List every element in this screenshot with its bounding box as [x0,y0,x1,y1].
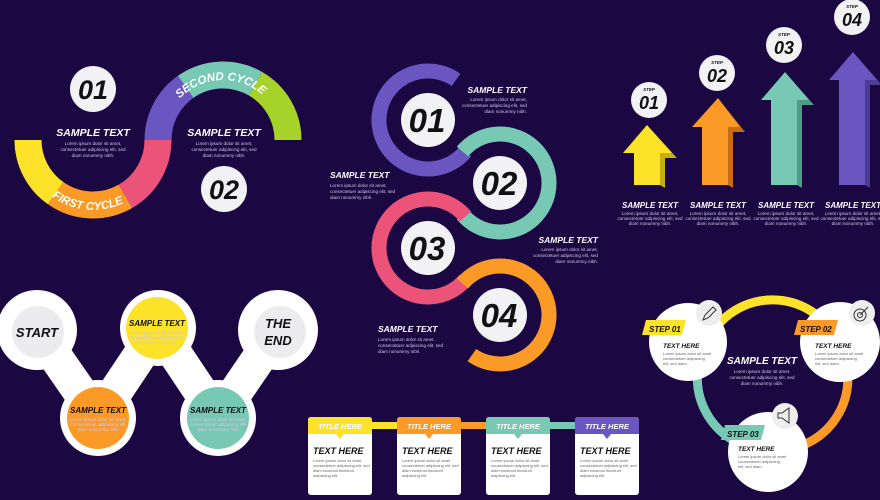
card 4 [575,417,639,495]
panel: step cycle [642,300,880,492]
arrow captions: diam nonummy nibh. [765,221,807,226]
arrow captions: consectetuer adipiscing elit, sed [617,216,683,221]
text block 2: diam nonummy nibh. [203,153,245,158]
step badges: STEP [711,60,724,65]
text: ring 4: consectetuer adipiscing elit, sed [378,343,444,348]
badge 02: 02 [481,165,518,202]
text: ring 1: Lorem ipsum dolor sit amet, [470,97,527,102]
node: sample teal: SAMPLE TEXT [190,406,247,415]
text: ring 2 [330,170,396,200]
arc: first cycle [28,140,158,205]
card 4: diam euismod tincidunt [580,468,622,473]
badge 01 [401,93,455,147]
label: second cycle: SECOND CYCLE [176,72,268,98]
arrow 4 [829,52,880,188]
badge 04: 04 [481,297,517,334]
panel: 3d arrows [617,0,880,226]
node: sample yellow: diam nonummy nibh [136,340,178,345]
step badges: STEP [643,87,656,92]
text: ring 4: SAMPLE TEXT [378,324,438,334]
text block 1: diam nonummy nibh. [72,153,114,158]
card 1: consectetuer adipiscing elit, sed [313,463,370,468]
text block 1 [56,127,131,158]
card 1: TEXT HERE [313,446,365,456]
arrow captions: consectetuer adipiscing elit, sed [685,216,751,221]
arrow captions [617,201,880,226]
text block 2: SAMPLE TEXT [187,127,262,139]
text: ring 3 [533,235,599,264]
arrow captions: Lorem ipsum dolor sit amet, [690,211,746,216]
ring 3 [379,199,466,297]
card 4: adipiscing elit. [580,473,605,478]
chain connectors [37,328,278,418]
card 4: TEXT HERE [580,446,632,456]
text block 2 [187,127,262,158]
center text: diam nonummy nibh. [741,381,783,386]
card 4: Lorem ipsum dolor sit amet [580,458,629,463]
step 3: consectetuer adipiscing [738,459,780,464]
text: ring 3: Lorem ipsum dolor sit amet, [541,247,598,252]
node: sample teal: diam nonummy nibh [197,427,239,432]
node: sample yellow: SAMPLE TEXT [129,319,186,328]
step 3: TEXT HERE [738,446,775,453]
center text [727,356,798,386]
card 2: TITLE HERE [407,422,452,431]
icon: megaphone [772,403,798,429]
node: sample orange: consectetuer adipiscing elit [70,422,126,427]
ring 4 [462,266,549,364]
step badges: STEP [846,4,859,9]
text: ring 2: consectetuer adipiscing elit, sed [330,189,396,194]
text: ring 1: consectetuer adipiscing elit, sed [462,103,527,108]
arrow captions: Lorem ipsum dolor sit amet, [622,211,678,216]
arrow captions: diam nonummy nibh. [832,221,874,226]
arrow captions: Lorem ipsum dolor sit amet, [825,211,880,216]
node: sample yellow: Lorem ipsum dolor sit amet, [129,330,185,335]
node: the end [254,306,306,358]
badge 02: 02 [209,175,239,205]
text: ring 1: diam nonummy nibh. [484,109,527,114]
step 2: TEXT HERE [815,343,852,350]
arrow captions: SAMPLE TEXT [690,201,747,210]
text: ring 3: consectetuer adipiscing elit, sed [533,253,598,258]
badge 04 [473,288,527,342]
panel: linked rings [330,71,599,364]
text: ring 3: diam nonummy nibh. [555,259,598,264]
step badges: 03 [774,38,794,58]
card 1: Lorem ipsum dolor sit amet [313,458,362,463]
text block 2: consectetuer adipiscing elit, sed [191,147,257,152]
node: sample teal [187,387,249,449]
step 2: elit, sed diam. [815,361,840,366]
badge 02 [201,166,247,212]
panel: s-curve cycles [14,62,302,218]
badge 01: 01 [78,75,108,105]
arrow captions: SAMPLE TEXT [758,201,815,210]
panel: title cards [308,417,639,495]
text: ring 1 [462,85,528,114]
arrow captions: diam nonummy nibh. [697,221,739,226]
arrow 1 [623,125,677,188]
node: sample orange: Lorem ipsum dolor sit amet, [70,417,126,422]
node: sample teal: Lorem ipsum dolor sit amet, [190,417,246,422]
node: sample orange [67,387,129,449]
center text: Lorem ipsum dolor sit amet, [734,369,790,374]
text block 1: SAMPLE TEXT [56,127,131,139]
badge 01: 01 [409,102,445,139]
arrow captions: SAMPLE TEXT [622,201,679,210]
step 1: consectetuer adipiscing [663,356,705,361]
card 2: consectetuer adipiscing elit, sed [402,463,459,468]
arrow captions: consectetuer adipiscing elit, sed [753,216,819,221]
icon: target [849,300,875,326]
card 4: consectetuer adipiscing elit, sed [580,463,637,468]
card 3 [486,417,550,495]
text: ring 3: SAMPLE TEXT [538,235,599,245]
text: ring 4 [378,324,444,354]
node: sample yellow: consectetuer adipiscing elit [129,335,185,340]
step 2 [794,300,880,382]
step 3: elit, sed diam. [738,464,763,469]
step 3: Lorem ipsum dolor sit amet [738,454,787,459]
node: sample yellow [126,297,188,359]
step 1: STEP 01 [649,325,681,334]
text: ring 4: Lorem ipsum dolor sit amet, [378,337,435,342]
cycle ring [697,300,848,450]
step badges: 04 [842,10,862,30]
center text: SAMPLE TEXT [727,356,798,367]
badge 03: 03 [409,230,445,267]
card 2: TEXT HERE [402,446,454,456]
step 2: Lorem ipsum dolor sit amet [815,351,864,356]
arrow 2 [692,98,745,188]
text: ring 2: diam nonummy nibh. [330,195,373,200]
step 1 [642,300,727,381]
step badges: 01 [639,93,659,113]
card 3: adipiscing elit. [491,473,516,478]
center text: consectetuer adipiscing elit, sed [729,375,795,380]
text: ring 4: diam nonummy nibh. [378,349,421,354]
node: the end: END [264,333,292,348]
badge 02 [473,156,527,210]
card 1 [308,417,372,495]
card 3: diam euismod tincidunt [491,468,533,473]
connector band [370,422,576,429]
node: sample orange: diam nonummy nibh [77,427,119,432]
step 2: STEP 02 [800,325,832,334]
arrow captions: diam nonummy nibh. [629,221,671,226]
label: first cycle: FIRST CYCLE [52,191,123,210]
arrow captions: SAMPLE TEXT [825,201,880,210]
step badges: STEP [778,32,791,37]
ring 1 [379,71,466,169]
node: sample teal: consectetuer adipiscing elit [190,422,246,427]
node: start: START [16,325,59,340]
text: ring 2: SAMPLE TEXT [330,170,390,180]
arc: second cycle [158,75,288,140]
card 2: adipiscing elit. [402,473,427,478]
card 2: Lorem ipsum dolor sit amet [402,458,451,463]
card 1: TITLE HERE [318,422,363,431]
icon: pencil [696,300,722,326]
text: ring 2: Lorem ipsum dolor sit amet, [330,183,387,188]
step 2: consectetuer adipiscing [815,356,857,361]
text: ring 1: SAMPLE TEXT [467,85,528,95]
step 3: STEP 03 [727,430,759,439]
text block 2: Lorem ipsum dolor sit amet, [196,141,252,146]
badge 03 [401,221,455,275]
arrow captions: Lorem ipsum dolor sit amet, [758,211,814,216]
card 3: TEXT HERE [491,446,543,456]
ring 2 [462,134,549,232]
card 2: diam euismod tincidunt [402,468,444,473]
card 4: TITLE HERE [585,422,630,431]
panel: start to end chain [0,290,318,456]
node: the end: THE [265,316,291,331]
node: sample orange: SAMPLE TEXT [70,406,127,415]
step 1: elit, sed diam. [663,361,688,366]
card 1: adipiscing elit. [313,473,338,478]
step 1: TEXT HERE [663,343,700,350]
text block 1: Lorem ipsum dolor sit amet, [65,141,121,146]
card 3: TITLE HERE [496,422,541,431]
badge 01 [70,66,116,112]
step 1: Lorem ipsum dolor sit amet [663,351,712,356]
card 2 [397,417,461,495]
card 1: diam euismod tincidunt [313,468,355,473]
step 3 [721,403,808,492]
node: start [12,306,64,358]
card 3: Lorem ipsum dolor sit amet [491,458,540,463]
step badges: 02 [707,66,727,86]
card 3: consectetuer adipiscing elit, sed [491,463,548,468]
text block 1: consectetuer adipiscing elit, sed [60,147,126,152]
step badges [631,0,870,118]
arrow 3 [761,72,814,188]
